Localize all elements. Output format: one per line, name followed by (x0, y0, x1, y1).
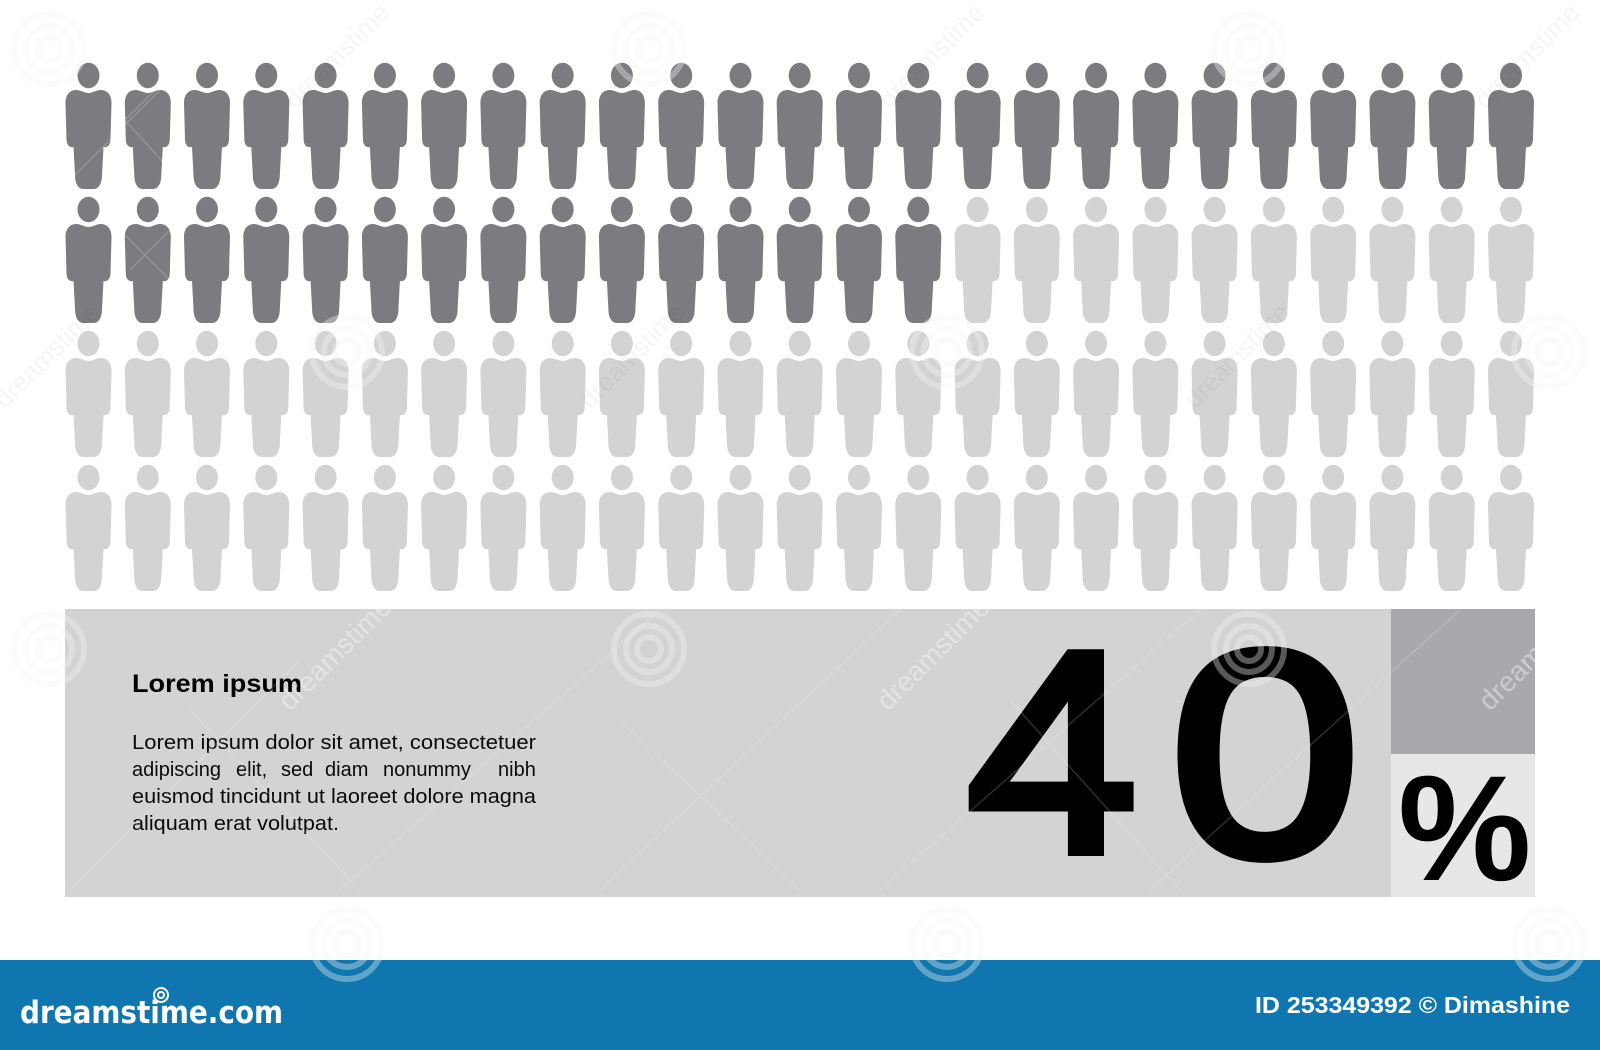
watermark overlay: dreamstime (870, 591, 996, 716)
pictogram row 4: 25 light people (66, 465, 1534, 591)
pictogram row 2: 10 light people (955, 197, 1534, 323)
heading: Lorem ipsum (132, 670, 302, 698)
text block: body copy (132, 732, 537, 835)
text block: body copy: aliquam erat volutpat. (132, 813, 339, 835)
panel: dark square upper right (1391, 609, 1535, 754)
text block: body copy: sed (281, 759, 313, 781)
watermark overlay: dreamstime (272, 591, 398, 716)
text block: body copy: euismod tincidunt ut laoreet dolore magna (132, 786, 537, 808)
watermark overlay: dreamstime (278, 0, 395, 114)
pictogram row 2: 15 dark people (66, 197, 941, 323)
footer brand: dreamstime.com (20, 995, 283, 1031)
pictogram row 3: 25 light people (66, 331, 1534, 457)
watermark overlay: dreamstime (1468, 0, 1585, 114)
big number: 40: 4 (967, 592, 1137, 912)
watermark overlay: dreamstime (873, 0, 990, 114)
pictogram row 1: 25 dark people (66, 63, 1534, 189)
percent sign: % (1398, 744, 1531, 912)
text block: body copy: nonummy (383, 759, 471, 781)
big number: 40 (967, 591, 1360, 917)
text block: body copy: diam (325, 759, 368, 781)
watermark overlay: dreamstime (573, 297, 690, 414)
text block: body copy: nibh (498, 759, 536, 781)
panel: summary background (65, 609, 1391, 897)
watermark overlay: dreamstime (1178, 297, 1295, 414)
panel: light square lower right (1391, 754, 1535, 897)
text block: body copy: Lorem ipsum dolor sit amet, consectetuer (132, 732, 536, 754)
text block: body copy: adipiscing (132, 759, 221, 781)
footer band (0, 960, 1600, 1050)
footer credit: ID 253349392 © Dimashine (1255, 992, 1570, 1018)
watermark overlay: dreamstime (1472, 591, 1598, 716)
text block: body copy: elit, (236, 759, 267, 781)
big number: 40: 0 (1170, 591, 1360, 917)
